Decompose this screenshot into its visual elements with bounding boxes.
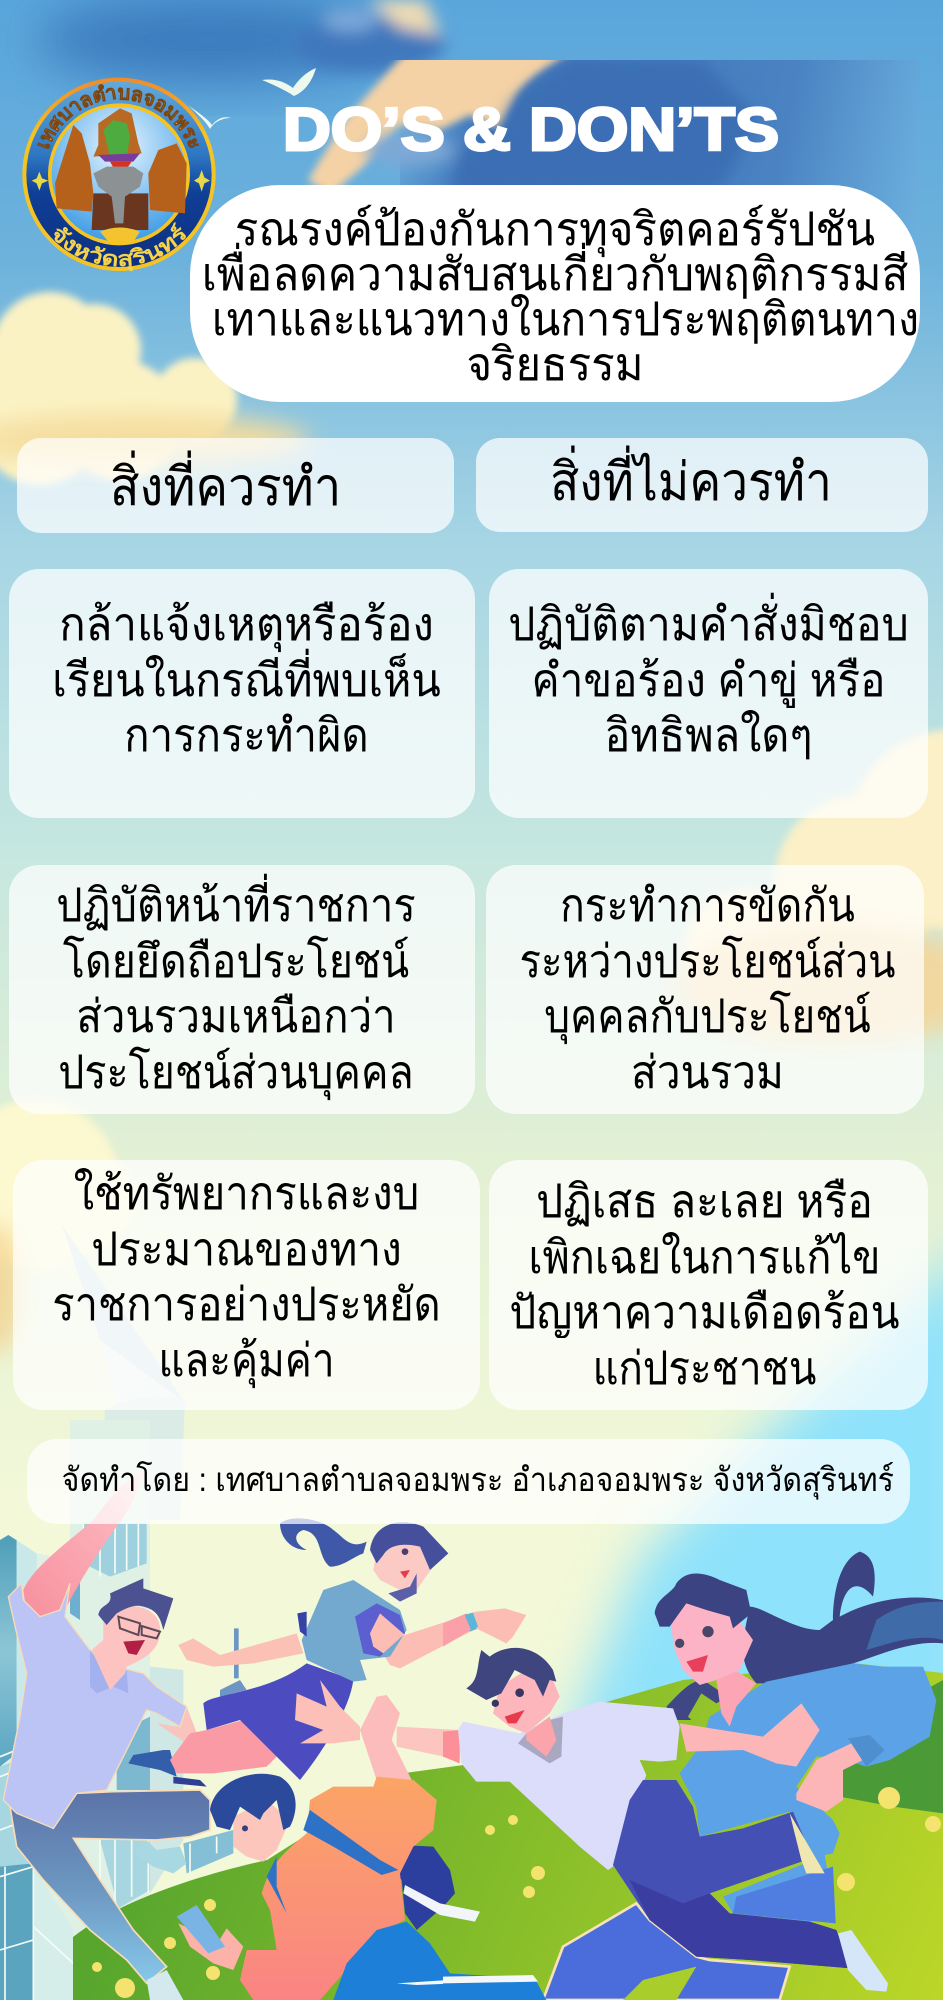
don't card 1: [489, 569, 928, 818]
person: man with glasses: [3, 1467, 210, 2000]
do card 2: ปฏิบัติหน้าที่ราชการ: [56, 879, 416, 931]
don't card 3: แก่ประชาชน: [593, 1342, 816, 1394]
heading: don't: สิ่งที่ไม่ควรทำ: [550, 453, 832, 512]
don't card 3: ปฏิเสธ ละเลย หรือ: [536, 1175, 873, 1227]
do card 1: กล้าแจ้งเหตุหรือร้อง: [59, 598, 434, 650]
dark top clouds: [35, 0, 385, 82]
heading: do: สิ่งที่ควรทำ: [110, 458, 341, 517]
icon: garuda statue: [93, 108, 142, 162]
seal text bottom: จังหวัดสุรินทร์: [54, 222, 186, 272]
cream cloud left: [0, 292, 237, 485]
seal text top: เทศบาลตำบลจอมพระ: [37, 84, 200, 149]
don't card 1: ปฏิบัติตามคำสั่งมิชอบ: [508, 598, 909, 650]
don't card 3: [489, 1160, 928, 1410]
don't card 1: คำขอร้อง คำขู่ หรือ: [532, 654, 885, 706]
bird 1: [262, 68, 316, 96]
footer credit: จัดทำโดย : เทศบาลตำบลจอมพระ อำเภอจอมพระ จังหวัดสุรินทร์: [62, 1461, 894, 1498]
don't card 1: อิทธิพลใดๆ: [604, 709, 813, 761]
heading: do: [17, 438, 454, 533]
intro pill: รณรงค์ป้องกันการทุจริตคอร์รัปชัน: [235, 203, 875, 255]
cyan sky right: [560, 1240, 943, 1760]
do card 1: การกระทำผิด: [124, 709, 369, 761]
bird 2: [188, 105, 231, 129]
hill shade: [820, 1680, 943, 1813]
intro pill: [190, 185, 920, 402]
illustration: green hills: [73, 1663, 943, 2000]
icon: elephant on pedestal: [92, 162, 148, 230]
footer credit: [27, 1439, 910, 1524]
intro pill: เพื่อลดความสับสนเกี่ยวกับพฤติกรรมสี: [202, 248, 908, 300]
do card 1: เรียนในกรณีที่พบเห็น: [52, 654, 441, 706]
don't card 3: ปัญหาความเดือดร้อน: [509, 1286, 900, 1338]
intro pill: เทาและแนวทางในการประพฤติตนทาง: [212, 293, 919, 345]
do card 3: ราชการอย่างประหยัด: [52, 1278, 441, 1330]
person: boy in orange hoodie: [177, 1680, 500, 2000]
logo badge: [22, 78, 216, 272]
do card 2: ส่วนรวมเหนือกว่า: [76, 990, 396, 1042]
do card 3: [13, 1160, 480, 1410]
don't card 2: [486, 865, 924, 1114]
do card 3: และคุ้มค่า: [158, 1334, 335, 1386]
heading: don't: [476, 438, 928, 532]
header band sky panel: [304, 60, 901, 210]
do card 2: ประโยชน์ส่วนบุคคล: [58, 1046, 414, 1098]
don't card 3: เพิกเฉยในการแก้ไข: [529, 1230, 880, 1282]
don't card 2: ส่วนรวม: [631, 1046, 784, 1098]
illustration: buildings: [0, 1420, 247, 2000]
person: boy in white tee: [443, 1608, 888, 2000]
paper plane: [62, 1225, 185, 1520]
do card 3: ใช้ทรัพยากรและงบ: [74, 1167, 419, 1219]
do card 1: [9, 569, 475, 818]
flowers: [92, 1787, 941, 1998]
don't card 2: ระหว่างประโยชน์ส่วน: [520, 934, 895, 986]
person: girl with long hair: [543, 1552, 943, 2000]
intro pill: จริยธรรม: [466, 338, 644, 390]
do card 3: ประมาณของทาง: [91, 1222, 402, 1274]
don't card 2: กระทำการขัดกัน: [560, 879, 855, 931]
do card 2: โดยยึดถือประโยชน์: [63, 934, 409, 986]
title: DO’S & DON’TS: [283, 96, 779, 163]
don't card 2: บุคคลกับประโยชน์: [544, 990, 871, 1042]
icon: left prang: [55, 125, 93, 212]
person: girl with ponytail: [170, 1518, 478, 1780]
do card 2: [9, 865, 475, 1114]
icon: right prang: [148, 143, 187, 213]
cream cloud right: [685, 730, 943, 1010]
cream cloud lower left: [0, 1100, 135, 1270]
